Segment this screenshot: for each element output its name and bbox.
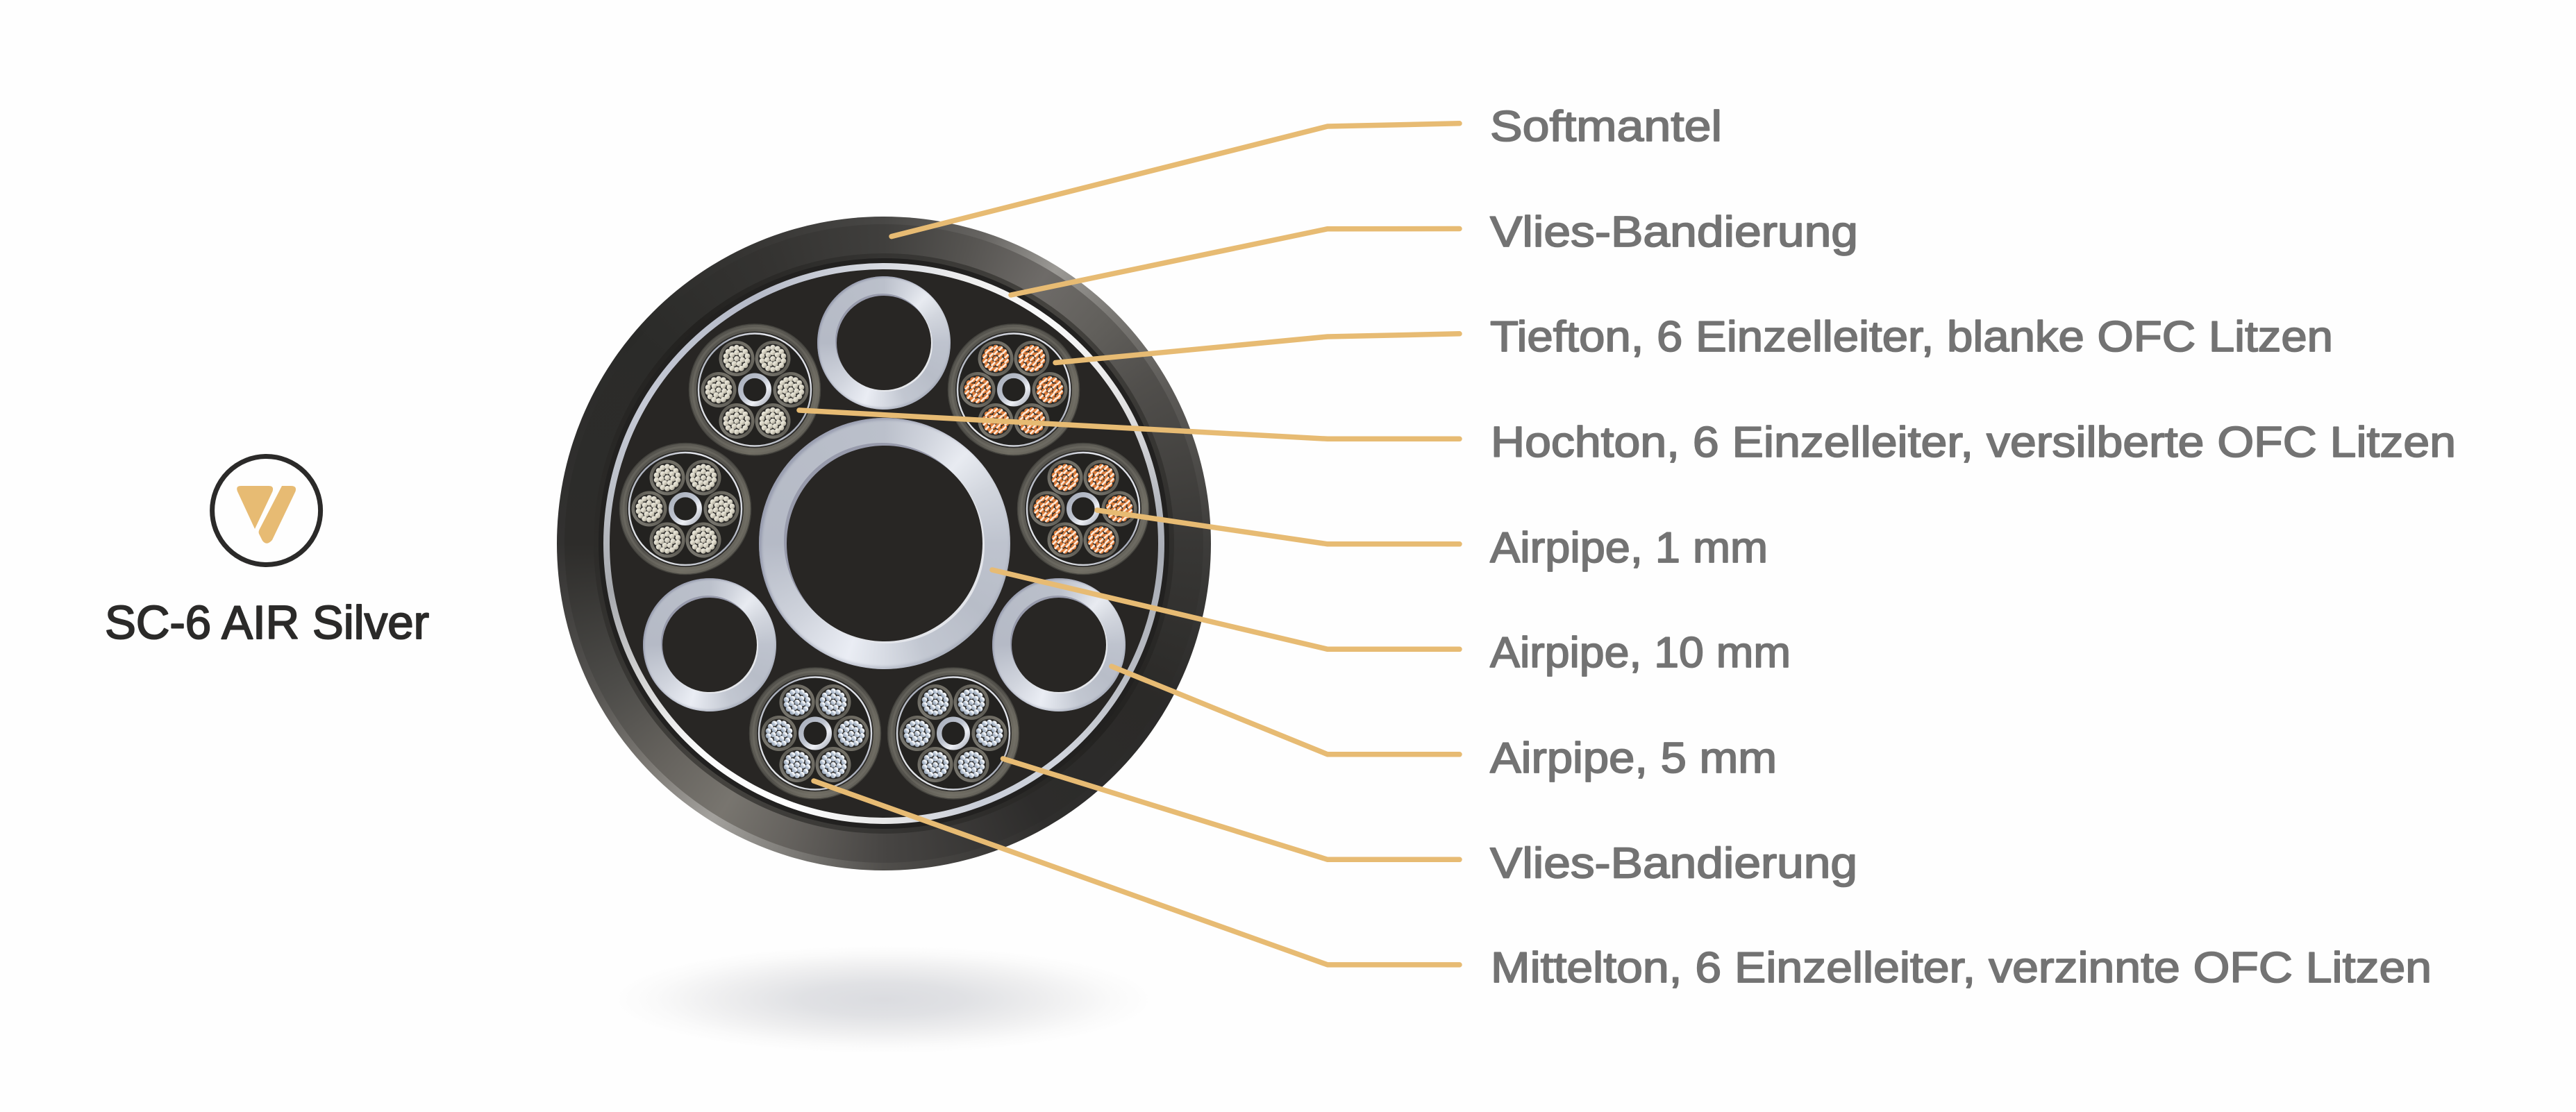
label: Vlies-Bandierung: Vlies-Bandierung (1490, 208, 1858, 256)
outer jacket: Softmantel (557, 217, 1211, 870)
airpipe 10 mm (758, 418, 1010, 669)
brand logo (212, 457, 321, 565)
label: Hochton: Hochton, 6 Einzelleiter, versilberte OFC Litzen (1491, 419, 2456, 466)
silver Vlies banding ring (603, 263, 1164, 824)
jacket inner dark band (594, 253, 1174, 834)
label: Vlies-Bandierung lower: Vlies-Bandierung (1490, 840, 1857, 887)
Mittelton conductor group, bottom left (749, 668, 881, 800)
airpipe 5 mm bottom right (992, 578, 1126, 711)
Tiefton conductor group, upper right (948, 323, 1080, 455)
Hochton conductor group, left (619, 443, 751, 575)
label: Airpipe 5 mm: Airpipe, 5 mm (1490, 734, 1777, 782)
Mittelton conductor group, bottom right (887, 668, 1019, 800)
inner filler (610, 269, 1158, 818)
label list (1490, 103, 2456, 992)
label: Tiefton: Tiefton, 6 Einzelleiter, blanke OFC Litzen (1490, 313, 2333, 361)
airpipe 5 mm top (817, 276, 951, 410)
label: Airpipe 1 mm: Airpipe, 1 mm (1490, 524, 1768, 572)
Hochton conductor group, upper left (689, 323, 821, 455)
product name: SC-6 AIR Silver (105, 596, 429, 649)
leader lines (799, 124, 1460, 965)
cable cross-section (557, 217, 1211, 870)
label: Mittelton: Mittelton, 6 Einzelleiter, verzinnte OFC Litzen (1491, 944, 2432, 992)
airpipe 5 mm bottom left (643, 578, 776, 711)
label: Softmantel: Softmantel (1490, 103, 1722, 151)
six conductor groups (619, 323, 1150, 800)
jacket main band (564, 224, 1203, 863)
Tiefton conductor group, right (1017, 443, 1149, 575)
label: Airpipe 10 mm: Airpipe, 10 mm (1490, 629, 1791, 677)
